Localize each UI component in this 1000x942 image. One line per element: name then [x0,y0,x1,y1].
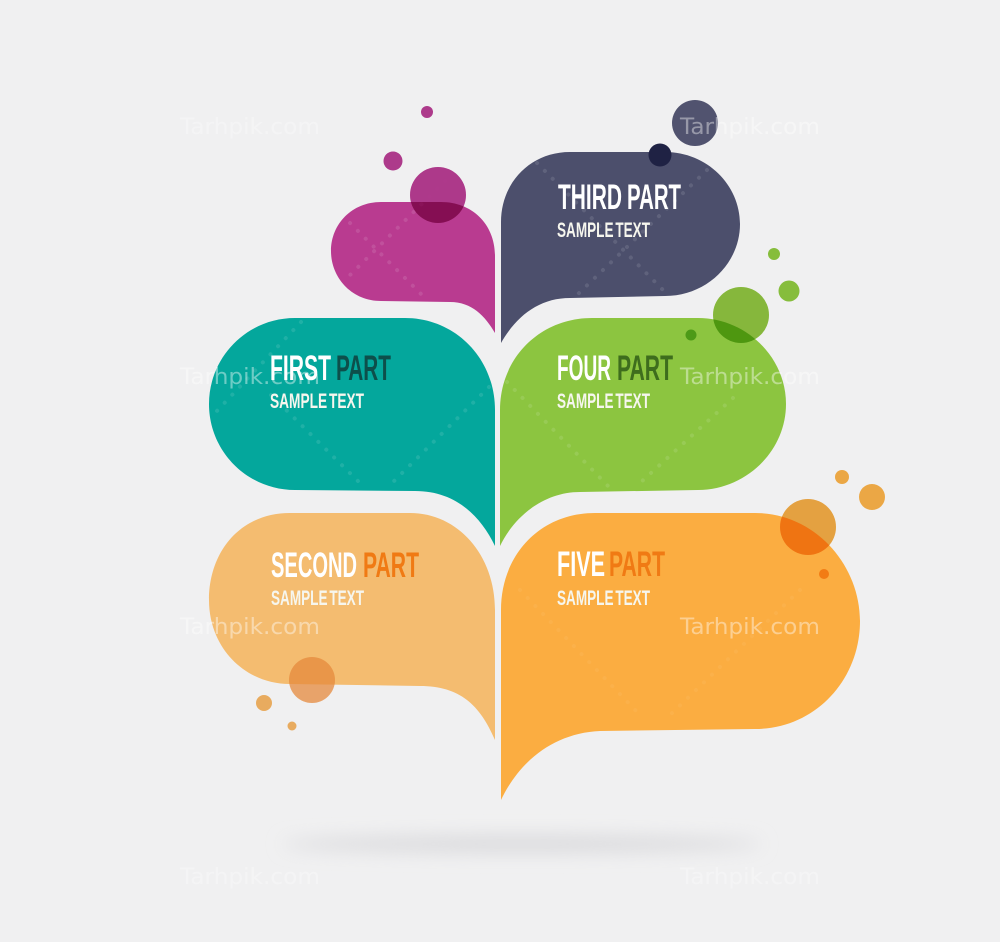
watermarks: Tarhpik.com [679,865,820,890]
third part heading: PART [627,178,681,217]
first part heading: FIRST [270,349,331,388]
magenta bubble watermark lines [345,173,453,300]
orange small dot [835,470,849,484]
watermarks: Tarhpik.com [679,365,820,390]
ground shadow [282,836,762,852]
panel: four part [500,248,800,546]
navy large circle [672,100,718,146]
green inner dot [686,330,696,340]
four part heading: PART [617,349,673,388]
orange medium dot [859,484,885,510]
panel: magenta bubble [331,106,495,333]
magenta large circle [410,167,466,223]
second part sample text: SAMPLE TEXT [271,587,364,610]
navy bubble shape [501,152,740,343]
light orange large circle [289,657,335,703]
orange bubble watermark lines [520,590,800,715]
green medium dot [778,280,800,302]
watermarks [179,115,820,890]
orange large circle [780,499,836,555]
watermarks: Tarhpik.com [179,865,320,890]
watermarks: Tarhpik.com [179,115,320,140]
second part heading: PART [363,546,419,585]
watermarks: Tarhpik.com [679,615,820,640]
panel: second part [209,513,495,740]
watermarks: Tarhpik.com [679,115,820,140]
magenta bubble shape [331,202,495,333]
five part sample text: SAMPLE TEXT [557,587,650,610]
third part sample text: SAMPLE TEXT [557,219,650,242]
five part heading: PART [609,545,665,584]
light orange bubble shape [209,513,495,740]
third part heading: THIRD [558,178,622,217]
green bubble shape [500,318,786,546]
watermarks: Tarhpik.com [179,615,320,640]
teal bubble watermark lines [215,322,489,488]
panel: five part [501,470,885,800]
light orange medium dot [256,695,272,711]
green bubble watermark lines [507,382,733,487]
first part heading: PART [336,349,391,388]
navy bubble watermark lines [537,163,707,295]
green small dot [768,248,780,260]
magenta small dot [421,106,433,118]
five part heading: FIVE [557,545,605,584]
orange inner dot [819,569,829,579]
watermarks: Tarhpik.com [179,365,320,390]
four part heading: FOUR [557,349,611,388]
teal bubble shape [209,318,495,546]
four part sample text: SAMPLE TEXT [557,390,650,413]
magenta medium dot [384,152,402,170]
panel: third part [501,100,740,343]
light orange small dot [288,722,296,730]
orange bubble shape [501,513,860,800]
panel: first part [209,318,495,546]
navy small circle [648,144,672,166]
first part sample text: SAMPLE TEXT [270,390,364,413]
green large circle [713,287,769,343]
second part heading: SECOND [271,546,357,585]
